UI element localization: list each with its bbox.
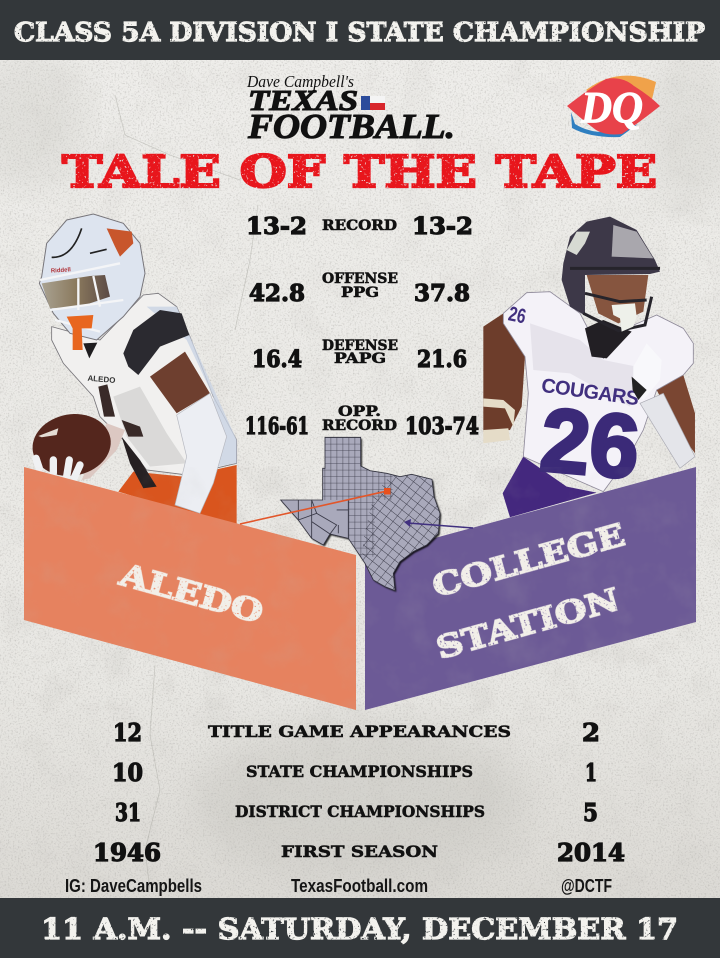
stats: program history (93, 718, 625, 867)
stat row: record: RECORD (322, 218, 397, 234)
sleeve (175, 393, 227, 513)
social links (65, 876, 612, 896)
history row: first season: 1946 (93, 838, 161, 867)
sleeve (640, 393, 695, 468)
stat row: offense ppg: 37.8 (414, 280, 470, 307)
history row: district championships (115, 798, 598, 827)
jersey (503, 292, 693, 492)
jersey number: 26 (537, 390, 643, 498)
waist towel (122, 437, 157, 488)
history row: first season: 2014 (557, 838, 625, 867)
top banner (0, 0, 720, 60)
stat row: offense ppg (249, 271, 470, 307)
glove (633, 343, 662, 400)
stat row: defense papg: PAPG (334, 351, 386, 367)
panel: College Station (365, 467, 696, 710)
arm (150, 352, 210, 413)
lace strap (82, 423, 125, 480)
visor (42, 275, 110, 308)
stat row: record: 13-2 (412, 213, 473, 240)
stat row: defense papg: 16.4 (252, 346, 302, 373)
stat row: record: 13-2 (246, 213, 307, 240)
social links: TexasFootball.com (291, 876, 428, 896)
social links: @DCTF (561, 876, 612, 896)
map: Texas counties (280, 437, 443, 593)
history row: state championships: 10 (112, 758, 143, 787)
stat row: opponent record (245, 404, 479, 440)
bottom banner (0, 898, 720, 958)
history row: first season (93, 838, 625, 867)
stat row: record (246, 213, 473, 240)
logo: Dave Campbell's Texas Football: Dave Campbell's (246, 72, 354, 91)
logo: Dave Campbell's Texas Football: TEXAS (248, 86, 358, 117)
logo: Dave Campbell's Texas Football (246, 72, 455, 146)
history row: district championships: DISTRICT CHAMPIONSHIPS (235, 802, 485, 821)
stat row: opponent record: 116-61 (245, 413, 309, 440)
team name: College: COLLEGE (429, 517, 629, 605)
history row: first season: FIRST SEASON (281, 842, 438, 861)
helmet (39, 214, 145, 340)
history row: district championships: 5 (583, 798, 598, 827)
history row: title game appearances: TITLE GAME APPEARANCES (208, 722, 511, 741)
stat row: offense ppg: 42.8 (249, 280, 305, 307)
ball and arm (483, 313, 525, 432)
facemask (570, 268, 660, 331)
neck (585, 320, 632, 358)
shoulder stripe (123, 310, 189, 375)
arrow: College Station location (404, 519, 473, 528)
mouthguard (612, 303, 637, 332)
jersey (52, 293, 237, 475)
team name: Aledo: ALEDO (115, 557, 267, 631)
banner heading: CLASS 5A DIVISION I STATE CHAMPIONSHIP (14, 18, 705, 48)
history row: state championships (112, 758, 597, 787)
helmet (562, 217, 660, 323)
logo: DQ: DQ (580, 83, 643, 132)
logo: Dave Campbell's Texas Football: FOOTBALL. (247, 107, 455, 146)
mouthguard (67, 315, 93, 350)
jersey number (98, 384, 143, 437)
arrow: Aledo location (240, 488, 390, 524)
stat row: defense papg (252, 338, 467, 373)
title: Tale of the Tape: TALE OF THE TAPE (62, 147, 657, 198)
stat row: defense papg: 21.6 (417, 346, 467, 373)
logo: DQ (567, 76, 660, 137)
game date and time: 11 A.M. -- SATURDAY, DECEMBER 17 (41, 912, 678, 946)
history row: title game appearances: 12 (113, 718, 142, 747)
football (28, 408, 116, 482)
history row: district championships: 31 (115, 798, 141, 827)
social links: IG: DaveCampbells (65, 876, 202, 896)
stat row: offense ppg: PPG (341, 285, 379, 301)
stat row: opponent record: RECORD (322, 418, 397, 434)
shorts (503, 457, 597, 517)
stat row: opponent record: OPP. (338, 404, 381, 420)
team name: Station: STATION (433, 582, 623, 667)
history row: state championships: STATE CHAMPIONSHIPS (246, 762, 473, 781)
jersey name: COUGARS (540, 375, 640, 410)
history row: title game appearances (113, 718, 600, 747)
history row: state championships: 1 (585, 758, 597, 787)
player: Aledo (28, 214, 237, 525)
shorts (118, 465, 237, 525)
player: Aledo: Riddell (51, 267, 71, 275)
shoulder number: 26 (506, 302, 528, 328)
player: College Station (483, 217, 695, 517)
player: Aledo: ALEDO (87, 374, 116, 385)
history row: title game appearances: 2 (582, 718, 600, 747)
stats: season comparison (245, 213, 479, 440)
right forearm (657, 375, 695, 453)
wrist tape (483, 398, 515, 443)
stat row: defense papg: DEFENSE (322, 338, 398, 354)
stat row: opponent record: 103-74 (405, 413, 479, 440)
stat row: offense ppg: OFFENSE (322, 271, 398, 287)
panel: Aledo (24, 467, 356, 710)
face (587, 275, 648, 323)
glove (36, 458, 80, 478)
